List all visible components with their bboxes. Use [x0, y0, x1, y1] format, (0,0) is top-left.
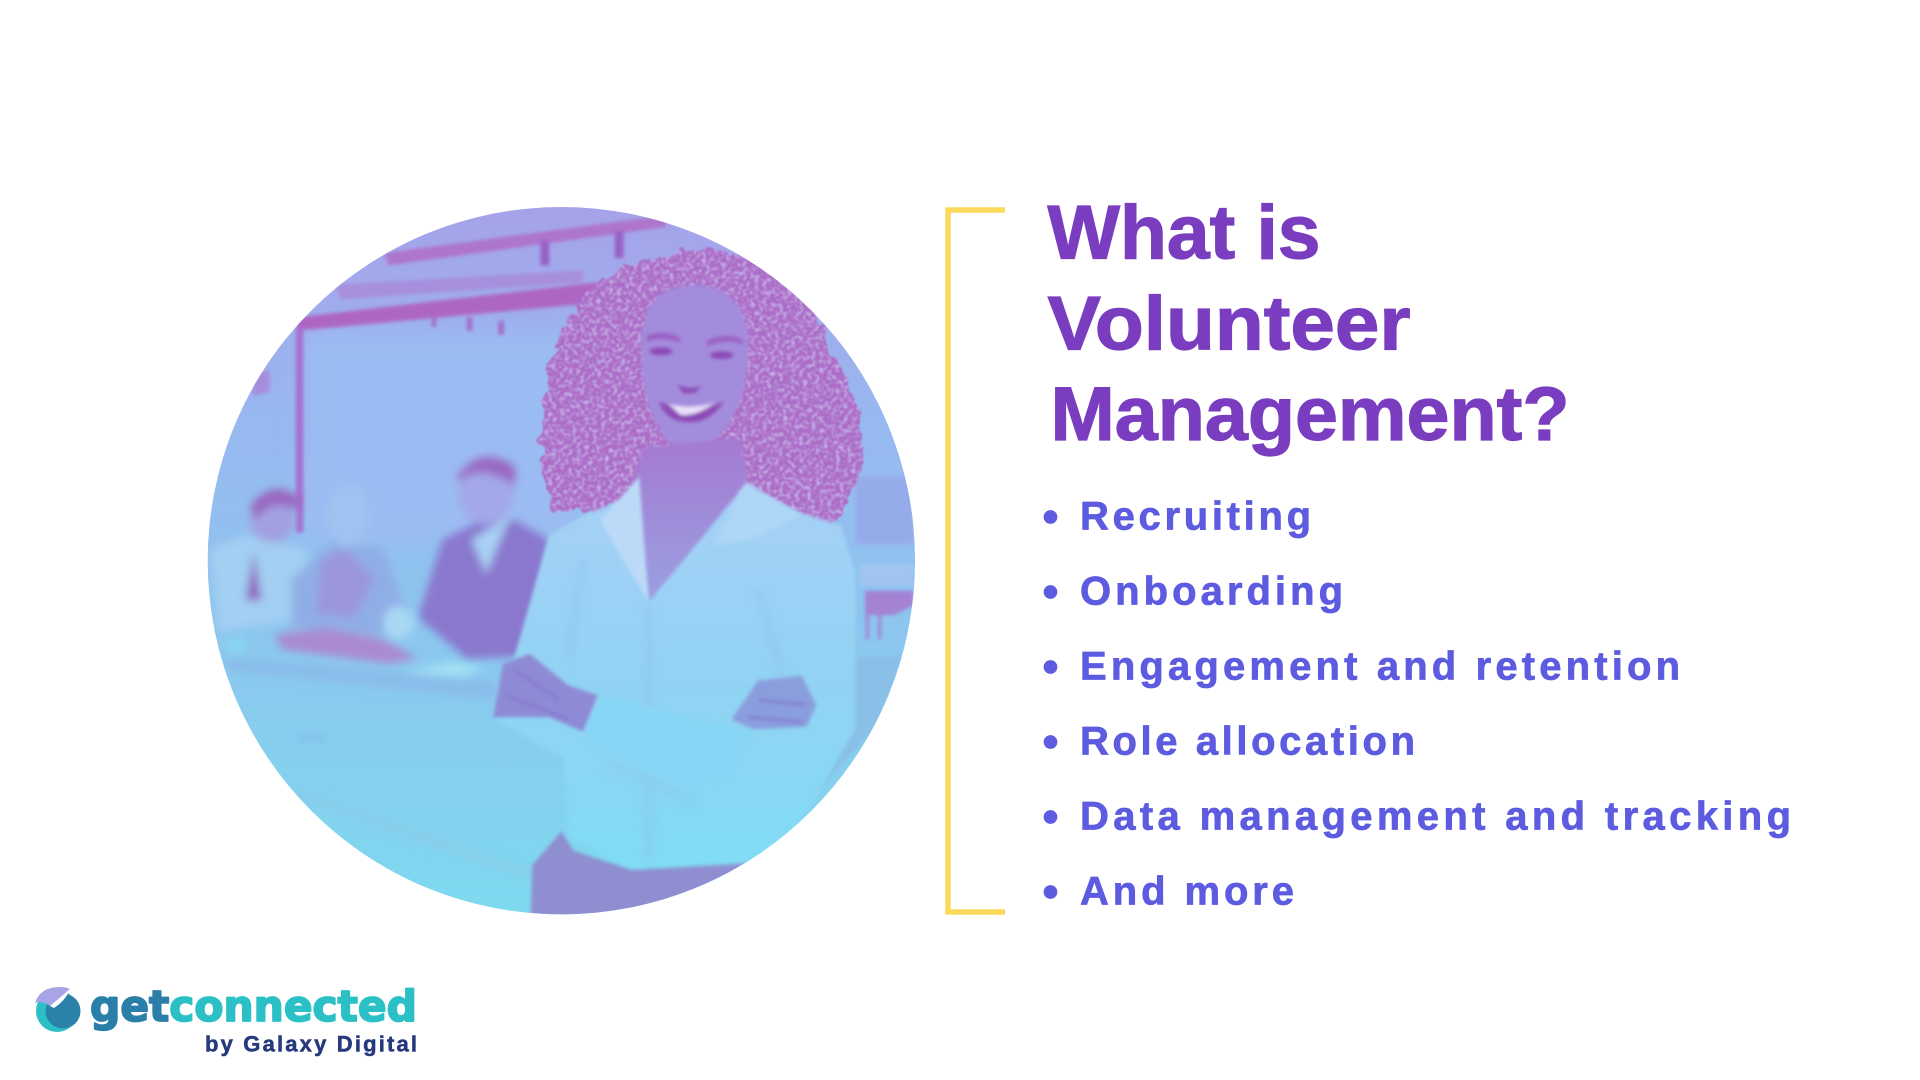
table with papers and cups — [228, 603, 495, 802]
right background furniture — [828, 476, 914, 778]
woman facial features — [646, 333, 744, 422]
yellow bracket — [948, 210, 1005, 912]
item: data management: Data management and tracking — [1080, 794, 1791, 838]
woman face — [641, 285, 748, 452]
back wall — [310, 334, 564, 531]
title: Management? — [1050, 372, 1570, 457]
shirt folds — [642, 775, 656, 852]
woman hands and sleeve — [492, 652, 818, 733]
woman hair — [541, 250, 863, 528]
item: recruiting: Recruiting — [1080, 494, 1311, 538]
title: Volunteer — [1048, 282, 1410, 366]
item: and more: And more — [1080, 870, 1294, 914]
item: role allocation: Role allocation — [1080, 720, 1415, 764]
circular duotone photo — [199, 200, 928, 928]
logo — [35, 982, 417, 1056]
ceiling beams and lamps — [253, 215, 666, 532]
title — [1048, 190, 1570, 457]
logo wordmark: getconnected — [90, 982, 417, 1032]
woman shirt — [496, 486, 855, 870]
logo icon — [35, 987, 80, 1032]
seated colleagues — [209, 457, 549, 659]
item: onboarding: Onboarding — [1080, 570, 1343, 614]
hand finger lines — [505, 671, 807, 722]
logo tagline: by Galaxy Digital — [205, 1032, 417, 1056]
woman trousers — [531, 831, 758, 916]
item: engagement: Engagement and retention — [1080, 644, 1680, 688]
bullet list — [1044, 494, 1791, 914]
title: What is — [1048, 190, 1320, 276]
shirt collar — [600, 477, 802, 603]
woman neck — [629, 438, 748, 603]
